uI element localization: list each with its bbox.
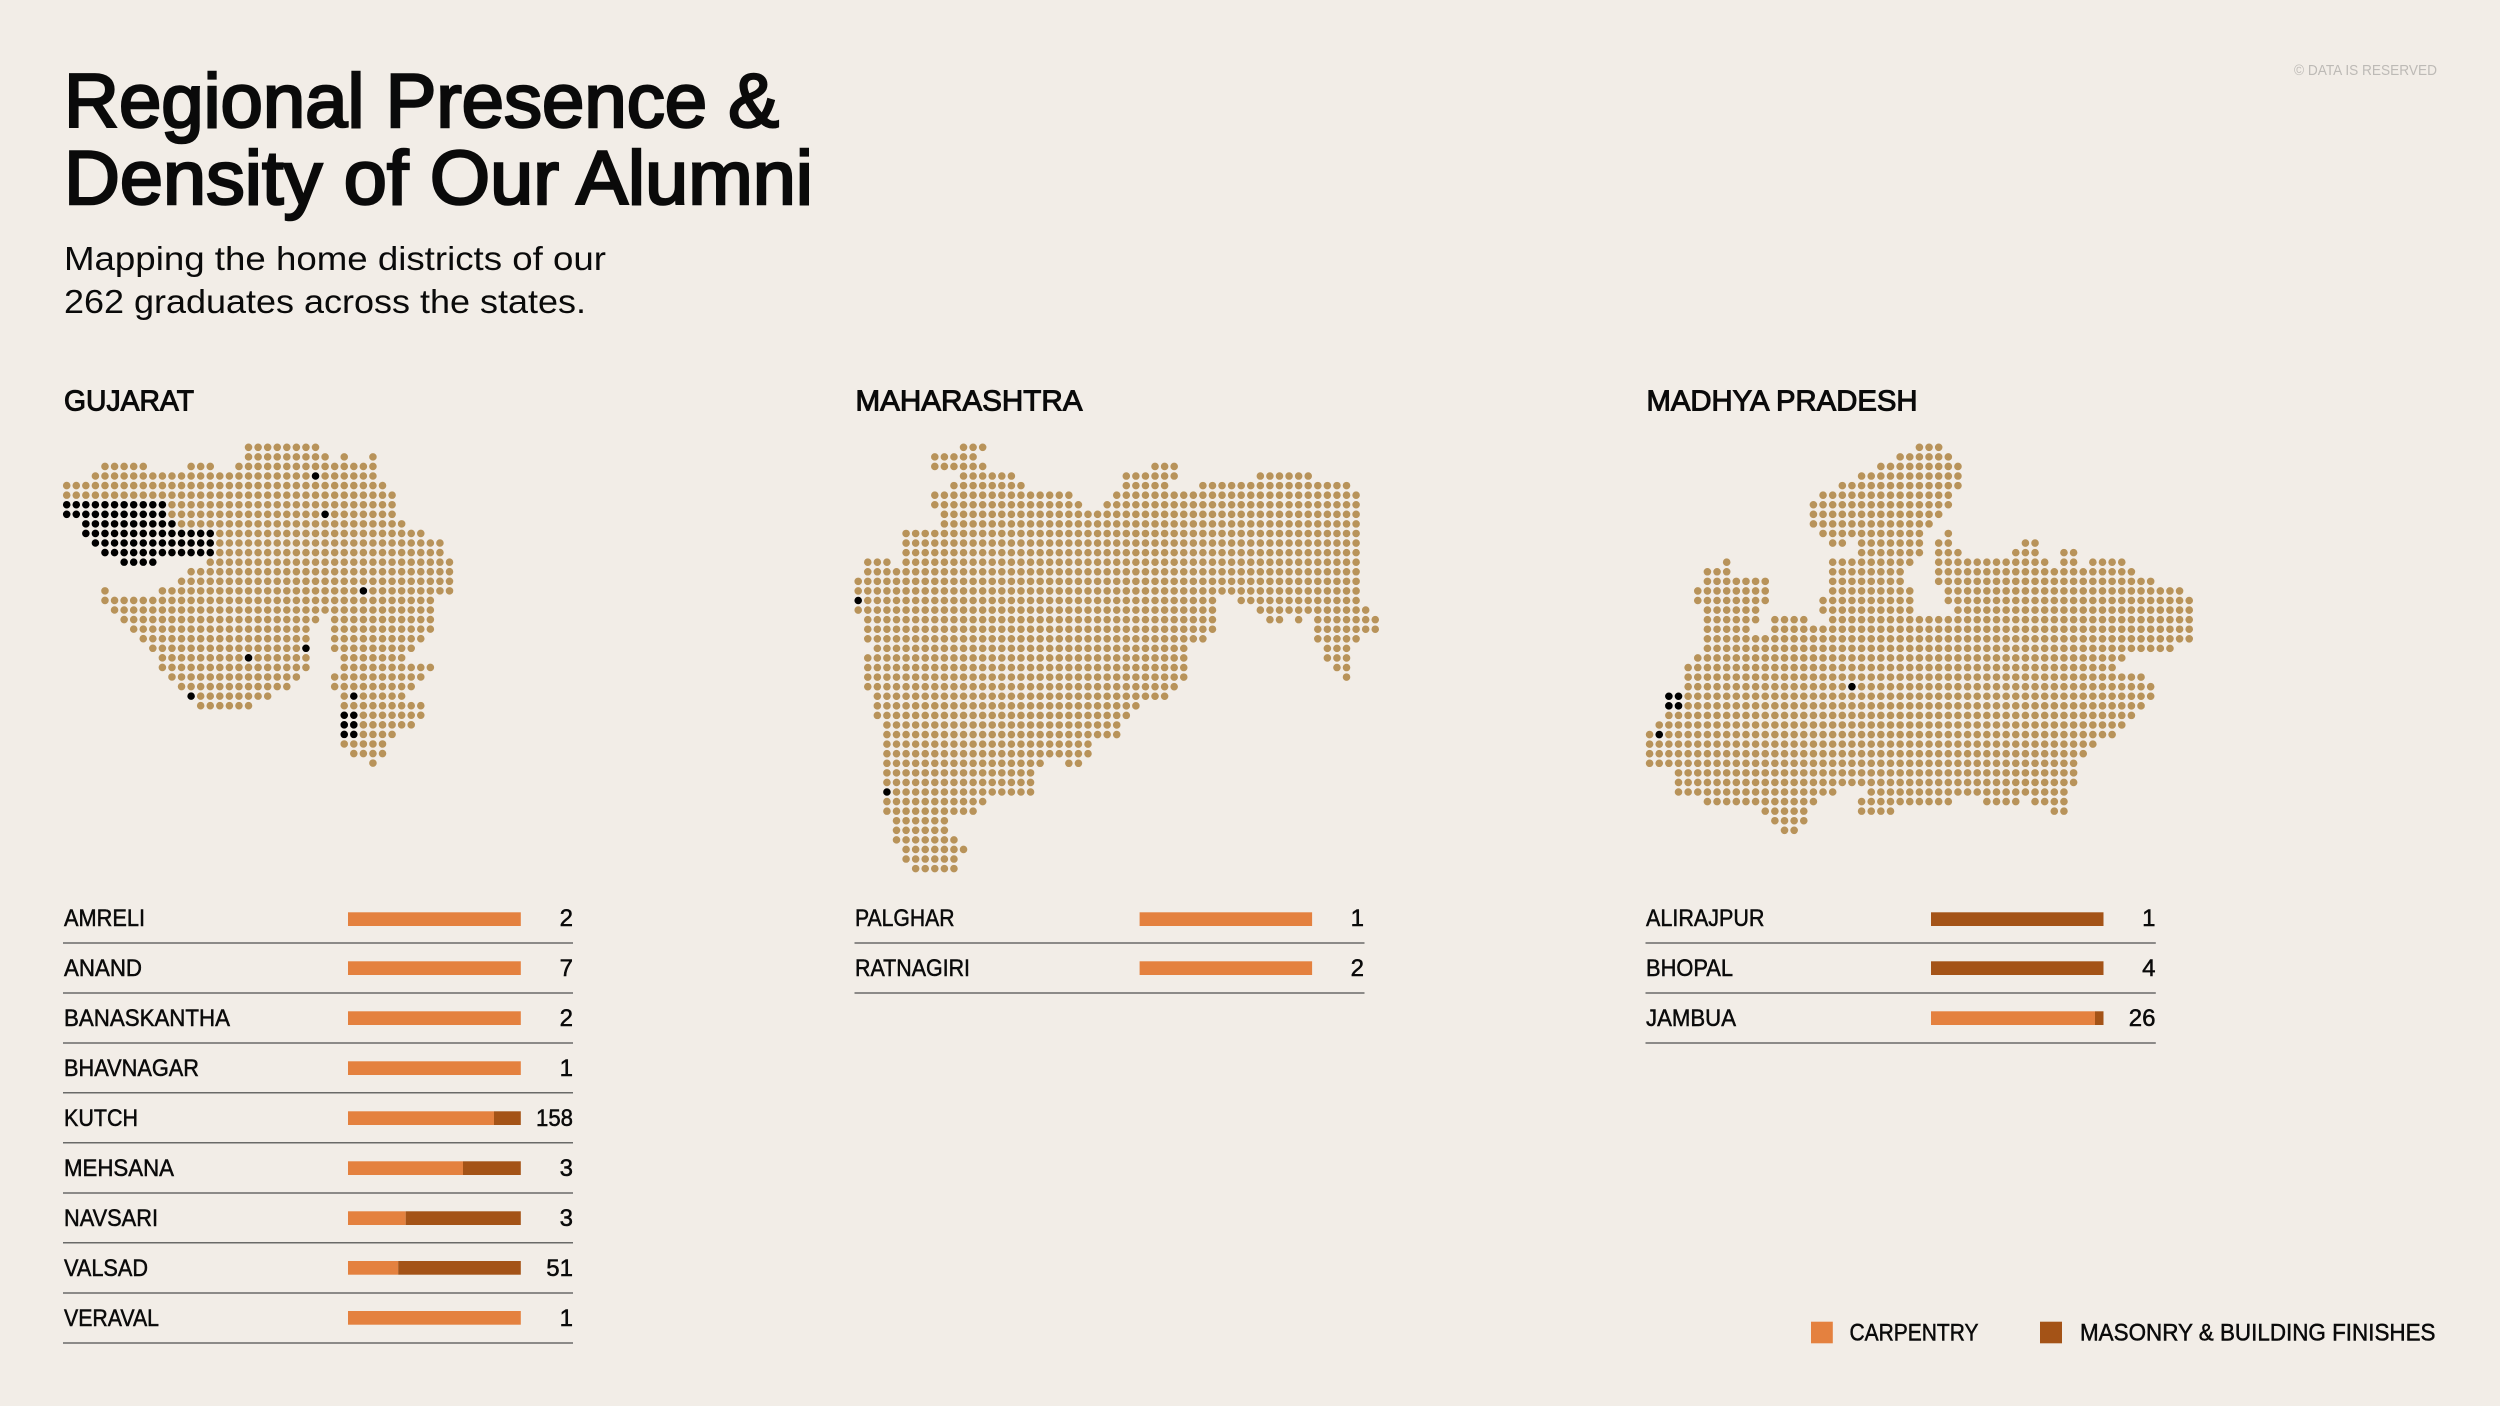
row: Valsad: 51 xyxy=(546,1255,573,1282)
row: Valsad: VALSAD xyxy=(64,1255,148,1282)
heading: Maharashtra: MAHARASHTRA xyxy=(856,386,1083,418)
row: Amreli xyxy=(63,905,573,943)
row: Veraval xyxy=(63,1305,573,1343)
row: Alirajpur: 1 xyxy=(2142,905,2156,932)
row: Amreli: 2 xyxy=(560,905,573,932)
legend xyxy=(1811,1320,2436,1347)
legend item: carpentry xyxy=(1811,1320,1978,1347)
title: Regional Presence & xyxy=(64,59,779,144)
legend item: carpentry: CARPENTRY xyxy=(1850,1320,1978,1347)
row: Ratnagiri xyxy=(854,955,1364,993)
row: Ratnagiri: 2 xyxy=(1351,955,1364,982)
copyright note: © DATA IS RESERVED xyxy=(2294,63,2437,79)
row: Amreli: AMRELI xyxy=(64,905,145,932)
row: Jambua: JAMBUA xyxy=(1646,1005,1736,1032)
row: Banaskantha: 2 xyxy=(560,1005,573,1032)
row: Navsari xyxy=(63,1205,573,1243)
row: Navsari: NAVSARI xyxy=(64,1205,158,1232)
subtitle xyxy=(64,240,606,320)
panel: Gujarat xyxy=(63,386,573,1343)
heading: Gujarat: GUJARAT xyxy=(64,386,194,418)
row: Bhopal xyxy=(1646,955,2156,993)
row: Bhavnagar: BHAVNAGAR xyxy=(64,1055,199,1082)
title: Density of Our Alumni xyxy=(64,136,813,221)
panel: Maharashtra xyxy=(854,386,1375,993)
row: Bhavnagar xyxy=(63,1055,573,1093)
row: Anand: 7 xyxy=(560,955,573,982)
subtitle: Mapping the home districts of our xyxy=(64,240,606,277)
row: Bhavnagar: 1 xyxy=(560,1055,573,1082)
row: Jambua xyxy=(1646,1005,2156,1043)
row: Valsad xyxy=(63,1255,573,1293)
row: Ratnagiri: RATNAGIRI xyxy=(855,955,970,982)
row: Bhopal: 4 xyxy=(2142,955,2156,982)
row: Mehsana: 3 xyxy=(560,1155,573,1182)
row: Veraval: VERAVAL xyxy=(64,1305,159,1332)
row: Alirajpur: ALIRAJPUR xyxy=(1646,905,1764,932)
dot map: Maharashtra xyxy=(858,447,1375,869)
heading: Madhya Pradesh: MADHYA PRADESH xyxy=(1646,386,1918,418)
table: Madhya Pradesh districts xyxy=(1646,905,2156,1043)
row: Banaskantha: BANASKANTHA xyxy=(64,1005,230,1032)
row: Mehsana xyxy=(63,1155,573,1193)
dot map: Gujarat xyxy=(67,447,450,763)
row: Kutch: KUTCH xyxy=(64,1105,138,1132)
row: Bhopal: BHOPAL xyxy=(1646,955,1733,982)
row: Kutch xyxy=(63,1105,573,1143)
row: Mehsana: MEHSANA xyxy=(64,1155,174,1182)
title xyxy=(64,59,813,221)
row: Alirajpur xyxy=(1646,905,2156,943)
row: Palghar: PALGHAR xyxy=(855,905,954,932)
row: Veraval: 1 xyxy=(560,1305,573,1332)
row: Jambua: 26 xyxy=(2129,1005,2156,1032)
table: Maharashtra districts xyxy=(854,905,1364,993)
row: Anand xyxy=(63,955,573,993)
row: Anand: ANAND xyxy=(64,955,142,982)
subtitle: 262 graduates across the states. xyxy=(64,283,586,320)
row: Banaskantha xyxy=(63,1005,573,1043)
dot map: Madhya Pradesh xyxy=(1650,447,2189,830)
row: Palghar xyxy=(854,905,1364,943)
table: Gujarat districts xyxy=(63,905,573,1343)
row: Navsari: 3 xyxy=(560,1205,573,1232)
panel: Madhya Pradesh xyxy=(1646,386,2189,1043)
row: Palghar: 1 xyxy=(1351,905,1364,932)
row: Kutch: 158 xyxy=(536,1105,573,1132)
legend item: masonry and building finishes: MASONRY & BUILDING FINISHES xyxy=(2080,1320,2436,1347)
